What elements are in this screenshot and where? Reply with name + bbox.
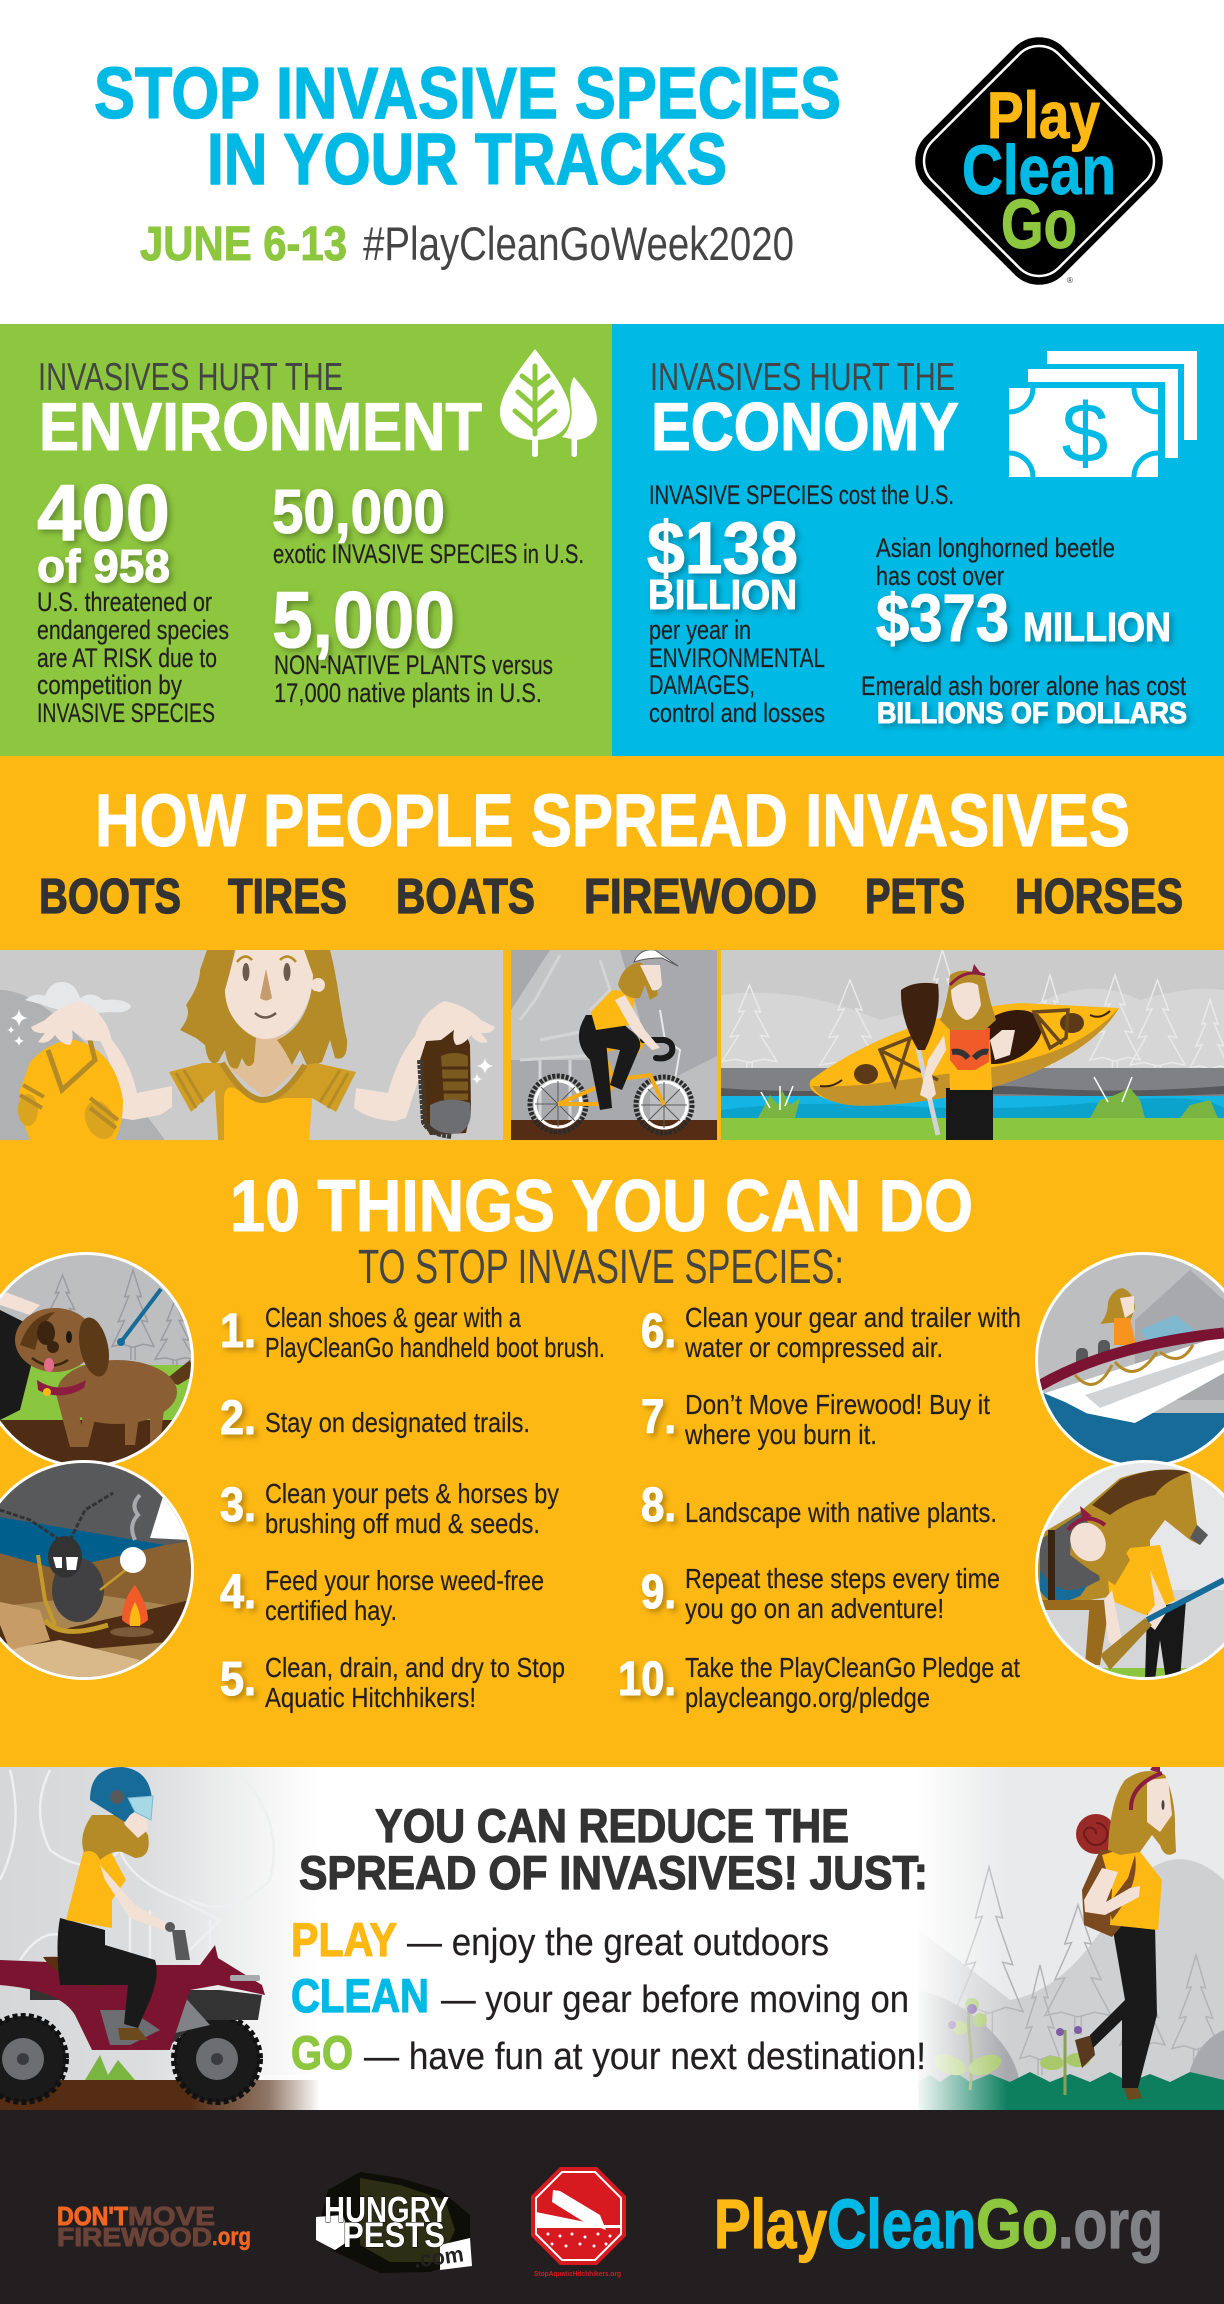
spread vectors list: HORSES bbox=[1015, 870, 1183, 924]
item 9: you go on an adventure! bbox=[685, 1593, 944, 1624]
item 5: 5. bbox=[220, 1653, 256, 1706]
item 6 bbox=[641, 1302, 1021, 1363]
environment heading: ENVIRONMENT bbox=[39, 389, 482, 465]
go line bbox=[291, 2026, 926, 2079]
stat: 138 billion: BILLION bbox=[648, 571, 797, 618]
logo: playcleango.org: .org bbox=[1058, 2185, 1163, 2263]
logo: playcleango.org: Play bbox=[714, 2185, 827, 2263]
stat: 138 billion: INVASIVE SPECIES cost the U.S. bbox=[649, 480, 954, 510]
item 3: Clean your pets & horses by bbox=[265, 1478, 559, 1509]
spread vectors list: PETS bbox=[865, 870, 965, 924]
clean line bbox=[291, 1969, 909, 2022]
stat: 400 of 958: U.S. threatened or bbox=[37, 587, 212, 617]
item 5: Aquatic Hitchhikers! bbox=[265, 1682, 476, 1713]
stat: 400 of 958: are AT RISK due to bbox=[37, 643, 217, 673]
date: JUNE 6-13 bbox=[140, 218, 347, 271]
stat: 373 million: Asian longhorned beetle bbox=[876, 533, 1115, 563]
icon: dollar bills: $ bbox=[1062, 386, 1108, 480]
item 9: 9. bbox=[641, 1566, 676, 1619]
spread vectors list: TIRES bbox=[228, 870, 347, 924]
things subheading: TO STOP INVASIVE SPECIES: bbox=[358, 1241, 844, 1294]
item 4: 4. bbox=[220, 1566, 256, 1619]
item 1 bbox=[220, 1302, 605, 1363]
illustration: girl holding sock and boot bbox=[0, 950, 503, 1144]
header bbox=[94, 23, 1177, 299]
stat: 138 billion: control and losses bbox=[649, 698, 825, 728]
go line: — have fun at your next destination! bbox=[364, 2036, 926, 2078]
stat: 5,000: NON-NATIVE PLANTS versus bbox=[274, 650, 553, 680]
hashtag: #PlayCleanGoWeek2020 bbox=[363, 217, 794, 270]
item 5 bbox=[220, 1652, 565, 1713]
circle illustration: beetle at campfire bbox=[0, 1460, 200, 1690]
economy heading bbox=[650, 356, 959, 465]
item 1: PlayCleanGo handheld boot brush. bbox=[265, 1332, 605, 1363]
reduce heading bbox=[299, 1799, 928, 1899]
item 4: Feed your horse weed-free bbox=[265, 1565, 544, 1596]
environment heading bbox=[38, 356, 482, 465]
list: things 1 to 5 bbox=[220, 1302, 605, 1713]
circle illustration: girl cleaning horse bbox=[1030, 1460, 1224, 1685]
economy heading: INVASIVES HURT THE bbox=[650, 356, 955, 399]
panel: invasives hurt the environment bbox=[0, 324, 612, 756]
logo: hungry pests bbox=[316, 2172, 472, 2273]
title bbox=[94, 54, 841, 200]
stat: 50,000: 50,000 bbox=[272, 478, 445, 547]
play line: — enjoy the great outdoors bbox=[407, 1922, 829, 1964]
panel: 10 things you can do bbox=[0, 1166, 1224, 1713]
logo: playcleango.org: Clean bbox=[827, 2185, 976, 2263]
item 2: Stay on designated trails. bbox=[265, 1407, 530, 1438]
title: IN YOUR TRACKS bbox=[207, 120, 727, 200]
logo: playcleango.org: Go bbox=[976, 2185, 1058, 2263]
title: STOP INVASIVE SPECIES bbox=[94, 54, 841, 134]
stat: 5,000 bbox=[272, 575, 553, 708]
item 8: Landscape with native plants. bbox=[685, 1497, 997, 1528]
things heading: 10 THINGS YOU CAN DO bbox=[230, 1166, 973, 1247]
logo: don't move firewood: MOVE bbox=[128, 2201, 215, 2231]
stat: 400 of 958: 400 bbox=[37, 468, 170, 557]
item 10 bbox=[618, 1652, 1020, 1713]
spread vectors list: BOATS bbox=[396, 870, 535, 924]
item 3 bbox=[220, 1478, 559, 1539]
logo: PlayCleanGo diamond: Clean bbox=[962, 131, 1116, 209]
clean line: CLEAN bbox=[291, 1969, 429, 2022]
stat: 138 billion: per year in bbox=[649, 615, 751, 645]
stat: 373 million: MILLION bbox=[1023, 604, 1171, 650]
logo: PlayCleanGo diamond: Go bbox=[1001, 185, 1077, 263]
item 9 bbox=[641, 1563, 1000, 1624]
environment heading: INVASIVES HURT THE bbox=[38, 356, 343, 399]
stat: 400 of 958: INVASIVE SPECIES bbox=[37, 698, 215, 728]
reduce heading: SPREAD OF INVASIVES! JUST: bbox=[299, 1846, 928, 1899]
panel: you can reduce the spread bbox=[0, 1767, 1224, 2110]
item 7 bbox=[641, 1389, 990, 1450]
stat: 50,000 bbox=[272, 478, 584, 569]
logo: stop aquatic hitchhikers: StopAquaticHitchhikers.org bbox=[534, 2269, 621, 2278]
icon: leaves bbox=[500, 349, 597, 457]
item 5: Clean, drain, and dry to Stop bbox=[265, 1652, 565, 1683]
stat: 400 of 958: of 958 bbox=[37, 540, 170, 592]
item 4 bbox=[220, 1565, 544, 1626]
play line bbox=[291, 1913, 829, 1966]
stat: emerald ash borer: BILLIONS OF DOLLARS bbox=[877, 697, 1187, 730]
illustration: hiker with backpack bbox=[918, 1767, 1224, 2110]
item 3: brushing off mud & seeds. bbox=[265, 1508, 540, 1539]
item 1: Clean shoes & gear with a bbox=[265, 1302, 521, 1333]
logo: don't move firewood: .org bbox=[212, 2223, 251, 2251]
stat: 400 of 958 bbox=[37, 468, 229, 728]
illustration: rider on ATV bbox=[0, 1767, 320, 2110]
item 2: 2. bbox=[220, 1392, 256, 1445]
economy heading: ECONOMY bbox=[651, 389, 959, 465]
item 10: 10. bbox=[618, 1653, 676, 1706]
stat: 50,000: exotic INVASIVE SPECIES in U.S. bbox=[273, 539, 584, 569]
illustration: girl with kayak at the lake bbox=[721, 950, 1224, 1140]
item 9: Repeat these steps every time bbox=[685, 1563, 1000, 1594]
stat: 400 of 958: competition by bbox=[37, 670, 182, 700]
list: things 6 to 10 bbox=[618, 1302, 1021, 1713]
logo: hungry pests: PESTS bbox=[343, 2216, 445, 2255]
item 10: Take the PlayCleanGo Pledge at bbox=[685, 1652, 1020, 1683]
item 2 bbox=[220, 1392, 530, 1445]
icon: dollar bills bbox=[1009, 351, 1197, 480]
illustration: bicyclist bbox=[511, 950, 717, 1140]
footer bbox=[0, 2110, 1224, 2304]
stat: 5,000: 17,000 native plants in U.S. bbox=[274, 678, 542, 708]
circle illustration: boat bbox=[1030, 1250, 1224, 1473]
item 7: where you burn it. bbox=[684, 1419, 877, 1450]
stat: 373 million: has cost over bbox=[876, 561, 1004, 591]
item 7: 7. bbox=[641, 1391, 676, 1444]
logo: playcleango.org bbox=[714, 2185, 1163, 2263]
panel: invasives hurt the economy bbox=[612, 324, 1224, 756]
item 4: certified hay. bbox=[265, 1595, 397, 1626]
item 6: Clean your gear and trailer with bbox=[685, 1302, 1021, 1333]
logo: hungry pests: HUNGRY bbox=[324, 2189, 449, 2230]
logo: PlayCleanGo diamond: Play bbox=[987, 78, 1100, 152]
logo: don't move firewood: DON'T bbox=[57, 2201, 128, 2231]
item 8: 8. bbox=[641, 1479, 676, 1532]
item 7: Don’t Move Firewood! Buy it bbox=[685, 1389, 990, 1420]
logo: don't move firewood bbox=[57, 2201, 251, 2252]
logo: PlayCleanGo diamond bbox=[901, 23, 1177, 299]
stat: 138 billion: $138 bbox=[647, 508, 798, 589]
panel: how people spread invasives bbox=[0, 756, 1224, 1767]
go line: GO bbox=[291, 2026, 353, 2079]
stat: 138 billion: DAMAGES, bbox=[649, 670, 755, 700]
circle illustration: muddy dog bbox=[0, 1250, 200, 1470]
item 1: 1. bbox=[220, 1305, 256, 1358]
stat: 373 million bbox=[876, 533, 1171, 656]
stat: emerald ash borer bbox=[861, 671, 1187, 730]
item 10: playcleango.org/pledge bbox=[685, 1682, 930, 1713]
logo: hungry pests: .com bbox=[412, 2241, 465, 2273]
item 6: 6. bbox=[641, 1305, 676, 1358]
clean line: — your gear before moving on bbox=[441, 1979, 909, 2021]
logo: PlayCleanGo diamond: ® bbox=[1067, 276, 1073, 285]
stat: 138 billion bbox=[647, 480, 954, 728]
reduce heading: YOU CAN REDUCE THE bbox=[375, 1799, 849, 1852]
logo: stop aquatic hitchhikers bbox=[531, 2167, 626, 2278]
stat: 373 million: $373 bbox=[876, 581, 1009, 656]
spread vectors list: BOOTS bbox=[39, 870, 181, 924]
stat: 5,000: 5,000 bbox=[272, 575, 455, 664]
stat: 138 billion: ENVIRONMENTAL bbox=[649, 643, 825, 673]
logo: don't move firewood: FIREWOOD bbox=[57, 2222, 212, 2252]
item 3: 3. bbox=[220, 1479, 256, 1532]
spread vectors list: FIREWOOD bbox=[584, 870, 817, 924]
spread vectors list bbox=[39, 870, 1183, 924]
stat: 400 of 958: endangered species bbox=[37, 615, 229, 645]
item 8 bbox=[641, 1479, 997, 1532]
play line: PLAY bbox=[291, 1913, 397, 1966]
item 6: water or compressed air. bbox=[684, 1332, 943, 1363]
